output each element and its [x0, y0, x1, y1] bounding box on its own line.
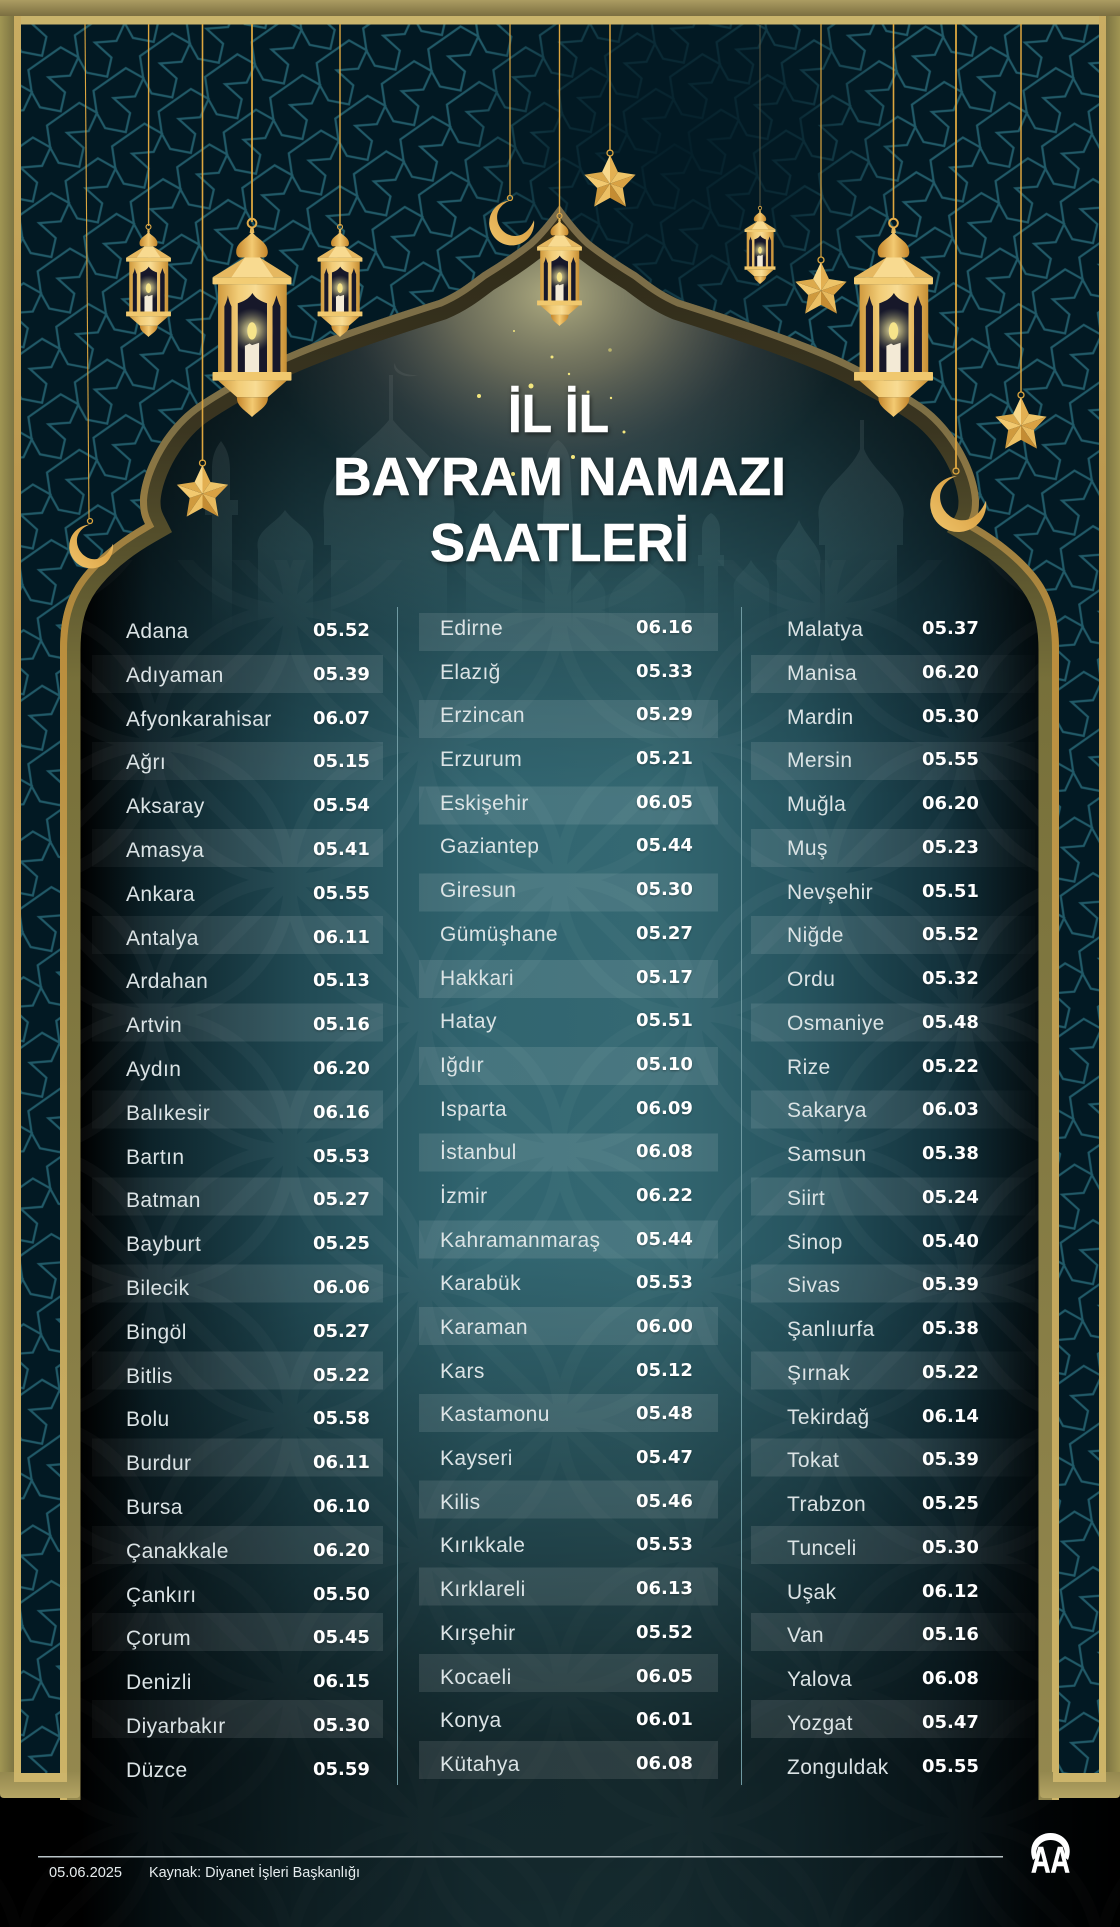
row Rize	[787, 1046, 1117, 1089]
row Yalova	[787, 1658, 1117, 1702]
star 3	[795, 257, 847, 314]
row Bartın: Bartın	[126, 1146, 184, 1169]
row Kırklareli: 06.13	[636, 1578, 693, 1599]
row Burdur	[126, 1452, 370, 1475]
row Kırşehir: 05.52	[636, 1622, 693, 1643]
row Kastamonu: Kastamonu	[440, 1403, 550, 1426]
row Batman	[126, 1189, 370, 1212]
row Karabük: 05.53	[636, 1272, 693, 1293]
row Erzurum	[440, 748, 693, 771]
row Elazığ	[440, 661, 693, 684]
row Muğla: Muğla	[787, 793, 846, 816]
lantern 6 large	[854, 219, 933, 417]
row Tokat: Tokat	[787, 1449, 839, 1472]
row Uşak: 06.12	[922, 1580, 979, 1602]
row Tekirdağ: Tekirdağ	[787, 1406, 870, 1428]
row Kırıkkale: 05.53	[636, 1534, 693, 1555]
row Artvin	[126, 1014, 370, 1037]
row Afyonkarahisar: 06.07	[313, 708, 370, 729]
column 1: Adana to Düzce	[126, 620, 370, 1782]
row Adana	[126, 620, 370, 643]
row Rize: 05.22	[922, 1056, 979, 1076]
row Siirt	[787, 1177, 1117, 1220]
row Adana: 05.52	[313, 620, 370, 641]
row Niğde	[787, 914, 1117, 958]
row Ardahan: Ardahan	[126, 970, 208, 993]
row Çankırı	[126, 1584, 370, 1607]
row Kırşehir: Kırşehir	[440, 1622, 516, 1645]
row Hakkari: 05.17	[636, 966, 693, 988]
row Şanlıurfa: Şanlıurfa	[787, 1318, 875, 1341]
row Hakkari: Hakkari	[440, 966, 514, 990]
row Van: Van	[787, 1624, 824, 1647]
crescent left	[69, 518, 113, 568]
row Gümüşhane: 05.27	[636, 923, 693, 944]
row Sivas: 05.39	[922, 1274, 979, 1295]
row Muğla: 06.20	[922, 793, 979, 814]
row İstanbul: İstanbul	[440, 1141, 517, 1164]
sparkles	[477, 330, 626, 476]
row Nevşehir: 05.51	[922, 880, 979, 902]
row Ordu: 05.32	[922, 968, 979, 989]
title: İL İL	[508, 384, 609, 444]
row Çanakkale: 06.20	[313, 1540, 370, 1561]
row Gaziantep	[440, 835, 693, 858]
row Aydın: 06.20	[313, 1058, 370, 1079]
row Ankara	[126, 883, 370, 906]
row Düzce: 05.59	[313, 1759, 370, 1780]
lantern 4 centre	[537, 213, 582, 326]
row Bilecik: 06.06	[313, 1277, 370, 1298]
lantern 3	[318, 224, 362, 337]
row Ankara: 05.55	[313, 883, 370, 904]
row Kars: 05.12	[636, 1360, 693, 1381]
row Ağrı: 05.15	[313, 751, 370, 772]
row Rize: Rize	[787, 1056, 831, 1078]
column 3: Malatya to Zonguldak	[787, 608, 1117, 1789]
row Artvin: 05.16	[313, 1014, 370, 1035]
row Kilis	[440, 1481, 770, 1524]
logo: AA: AA	[1031, 1840, 1070, 1880]
row Siirt: Siirt	[787, 1187, 825, 1210]
row Karaman	[440, 1306, 770, 1350]
row Samsun: Samsun	[787, 1143, 866, 1166]
row Bitlis	[126, 1365, 370, 1388]
row Malatya: 05.37	[922, 618, 979, 639]
row Mersin: 05.55	[922, 749, 979, 770]
row Eskişehir: 06.05	[636, 792, 693, 813]
divider 1	[397, 607, 398, 1785]
row Bingöl	[126, 1321, 370, 1344]
row Bilecik: Bilecik	[126, 1277, 189, 1300]
row Tunceli: Tunceli	[787, 1537, 857, 1560]
row Zonguldak: Zonguldak	[787, 1756, 889, 1778]
row Yozgat	[787, 1702, 1117, 1746]
row Kütahya: 06.08	[636, 1753, 693, 1774]
row Amasya	[126, 839, 370, 862]
row Gaziantep: Gaziantep	[440, 835, 539, 858]
row Trabzon: Trabzon	[787, 1493, 866, 1516]
row Şırnak: 05.22	[922, 1362, 979, 1383]
row Şanlıurfa: 05.38	[922, 1318, 979, 1339]
row İzmir: İzmir	[440, 1185, 488, 1208]
row Burdur: 06.11	[313, 1452, 370, 1473]
row Bitlis: 05.22	[313, 1365, 370, 1386]
lantern 1	[126, 224, 171, 337]
row Yalova: Yalova	[787, 1668, 852, 1691]
row Sakarya: Sakarya	[787, 1099, 867, 1122]
row Trabzon	[787, 1483, 1117, 1527]
lantern 5 small	[745, 206, 775, 284]
row Denizli: Denizli	[126, 1671, 192, 1694]
row Trabzon: 05.25	[922, 1493, 979, 1514]
row Karabük: Karabük	[440, 1272, 521, 1295]
row Kırklareli	[440, 1568, 770, 1612]
row Kilis: 05.46	[636, 1491, 693, 1512]
row İzmir	[440, 1175, 770, 1219]
row Konya: 06.01	[636, 1709, 693, 1730]
row Eskişehir: Eskişehir	[440, 792, 529, 815]
row Osmaniye	[787, 1002, 1117, 1046]
row Çankırı: Çankırı	[126, 1584, 196, 1607]
row Uşak	[787, 1570, 1117, 1614]
row Erzincan: 05.29	[636, 704, 693, 725]
arch border	[60, 205, 1059, 1800]
row Antalya: Antalya	[126, 927, 199, 950]
row Bingöl: Bingöl	[126, 1321, 187, 1344]
row Bursa: Bursa	[126, 1496, 183, 1519]
row Malatya: Malatya	[787, 618, 863, 641]
row Muş: Muş	[787, 837, 828, 860]
title: SAATLERİ	[430, 513, 689, 573]
star 4	[995, 392, 1047, 449]
row Bilecik	[126, 1277, 370, 1300]
row Bayburt: Bayburt	[126, 1233, 201, 1256]
row Van	[787, 1614, 1117, 1658]
row Yalova: 06.08	[922, 1668, 979, 1689]
row Isparta	[440, 1088, 770, 1131]
row Şırnak	[787, 1352, 1117, 1396]
row Bartın: 05.53	[313, 1146, 370, 1167]
row Kocaeli: Kocaeli	[440, 1666, 512, 1688]
row Antalya: 06.11	[313, 927, 370, 948]
row Edirne	[440, 617, 693, 640]
row Kayseri: Kayseri	[440, 1447, 513, 1470]
row Diyarbakır: 05.30	[313, 1715, 370, 1736]
row Erzincan: Erzincan	[440, 704, 525, 727]
row Manisa	[787, 652, 1117, 696]
divider 2	[741, 607, 742, 1785]
row Ardahan: 05.13	[313, 970, 370, 991]
row Ankara: Ankara	[126, 883, 195, 906]
row Elazığ: 05.33	[636, 661, 693, 682]
row Diyarbakır: Diyarbakır	[126, 1715, 226, 1738]
row Sinop	[787, 1220, 1117, 1264]
row Kırklareli: Kırklareli	[440, 1578, 526, 1601]
arch interior	[61, 206, 1057, 1927]
row Osmaniye: 05.48	[922, 1012, 979, 1033]
row Bayburt	[126, 1233, 370, 1256]
row Adıyaman: Adıyaman	[126, 664, 224, 687]
row Iğdır: Iğdır	[440, 1054, 484, 1077]
lantern 2 large	[213, 219, 291, 417]
row Kars: Kars	[440, 1360, 485, 1383]
row Yozgat: Yozgat	[787, 1712, 853, 1735]
row Ağrı: Ağrı	[126, 751, 166, 774]
row Tunceli	[787, 1527, 1117, 1570]
row Hatay: Hatay	[440, 1010, 497, 1033]
row Tekirdağ	[787, 1396, 1117, 1439]
row Konya: Konya	[440, 1709, 502, 1732]
row Iğdır: 05.10	[636, 1054, 693, 1075]
row Gümüşhane: Gümüşhane	[440, 923, 558, 946]
stripes: column 3	[751, 655, 998, 1738]
row Bursa: 06.10	[313, 1496, 370, 1517]
row Giresun: Giresun	[440, 879, 516, 902]
row Sivas: Sivas	[787, 1274, 840, 1297]
row Burdur: Burdur	[126, 1452, 191, 1475]
row Mersin	[787, 739, 1117, 783]
row Aksaray: 05.54	[313, 795, 370, 816]
row Hatay: 05.51	[636, 1010, 693, 1031]
row Çanakkale	[126, 1540, 370, 1563]
row Balıkesir: Balıkesir	[126, 1102, 210, 1125]
row Aksaray	[126, 795, 370, 818]
row Mersin: Mersin	[787, 749, 852, 772]
row Kütahya: Kütahya	[440, 1753, 520, 1776]
row Van: 05.16	[922, 1624, 979, 1645]
row Niğde: 05.52	[922, 924, 979, 945]
row Kahramanmaraş: Kahramanmaraş	[440, 1229, 600, 1252]
row Eskişehir	[440, 792, 693, 815]
row Adıyaman	[126, 664, 370, 687]
row Artvin: Artvin	[126, 1014, 182, 1037]
row Çorum	[126, 1627, 370, 1650]
column 2: Edirne to Kütahya	[440, 617, 693, 1776]
row Batman: 05.27	[313, 1189, 370, 1210]
star 1	[177, 460, 228, 517]
row Denizli: 06.15	[313, 1671, 370, 1692]
row Amasya: 05.41	[313, 839, 370, 860]
row Kahramanmaraş: 05.44	[636, 1229, 693, 1250]
row Düzce: Düzce	[126, 1759, 188, 1782]
row Bolu: Bolu	[126, 1408, 170, 1431]
row Bolu	[126, 1408, 370, 1431]
row Balıkesir: 06.16	[313, 1102, 370, 1123]
title	[333, 384, 786, 573]
mosque silhouette	[205, 364, 904, 584]
row Mardin: Mardin	[787, 706, 854, 728]
row Malatya	[787, 608, 1117, 652]
row Kocaeli: 06.05	[636, 1666, 693, 1686]
row Isparta: 06.09	[636, 1098, 693, 1119]
row Tokat: 05.39	[922, 1449, 979, 1470]
footer rule	[38, 1856, 1003, 1858]
row İzmir: 06.22	[636, 1185, 693, 1206]
row Afyonkarahisar: Afyonkarahisar	[126, 708, 272, 731]
crescent top	[489, 196, 534, 245]
row Afyonkarahisar	[126, 708, 370, 731]
row Hatay	[440, 1010, 693, 1033]
row Aydın: Aydın	[126, 1058, 181, 1081]
row Çorum: Çorum	[126, 1627, 191, 1650]
row Kastamonu: 05.48	[636, 1403, 693, 1424]
row Manisa: Manisa	[787, 662, 857, 685]
row Batman: Batman	[126, 1189, 201, 1212]
row Çanakkale: Çanakkale	[126, 1540, 229, 1563]
row Ağrı	[126, 751, 370, 774]
row Bayburt: 05.25	[313, 1233, 370, 1254]
row Balıkesir	[126, 1102, 370, 1125]
row Tunceli: 05.30	[922, 1537, 979, 1558]
row Tekirdağ: 06.14	[922, 1406, 979, 1426]
row Nevşehir: Nevşehir	[787, 880, 873, 904]
row Çankırı: 05.50	[313, 1584, 370, 1605]
footer date: 05.06.2025	[49, 1865, 122, 1881]
row Kırşehir	[440, 1612, 770, 1656]
row Bolu: 05.58	[313, 1408, 370, 1429]
row Siirt: 05.24	[922, 1187, 979, 1208]
row Sakarya	[787, 1089, 1117, 1133]
row Kırıkkale: Kırıkkale	[440, 1534, 525, 1557]
row Denizli	[126, 1671, 370, 1694]
row Kayseri: 05.47	[636, 1447, 693, 1468]
row Erzurum: Erzurum	[440, 748, 522, 771]
title: BAYRAM NAMAZI	[333, 447, 786, 507]
row Mardin: 05.30	[922, 706, 979, 726]
row Erzincan	[440, 704, 693, 727]
row İstanbul	[440, 1131, 770, 1175]
row Adıyaman: 05.39	[313, 664, 370, 685]
row Bitlis: Bitlis	[126, 1365, 173, 1388]
row Tokat	[787, 1439, 1117, 1483]
row Aksaray: Aksaray	[126, 795, 205, 818]
row Sakarya: 06.03	[922, 1099, 979, 1120]
row Muş: 05.23	[922, 837, 979, 858]
row Bingöl: 05.27	[313, 1321, 370, 1342]
row Kastamonu	[440, 1393, 770, 1437]
row Iğdır	[440, 1054, 693, 1077]
row Karaman: 06.00	[636, 1316, 693, 1337]
row Ordu: Ordu	[787, 968, 835, 991]
row Düzce	[126, 1759, 370, 1782]
row Aydın	[126, 1058, 370, 1081]
row Kırıkkale	[440, 1524, 770, 1568]
row Adana: Adana	[126, 620, 189, 643]
row Zonguldak	[787, 1746, 1117, 1789]
row Giresun	[440, 879, 693, 902]
row Bartın	[126, 1146, 370, 1169]
row Zonguldak: 05.55	[922, 1756, 979, 1776]
row Osmaniye: Osmaniye	[787, 1012, 885, 1035]
crescent right	[930, 468, 986, 532]
stripes: column 1	[92, 655, 383, 1738]
row Gümüşhane	[440, 923, 693, 946]
row Kahramanmaraş	[440, 1219, 770, 1262]
row Elazığ: Elazığ	[440, 661, 501, 684]
row Kayseri	[440, 1437, 770, 1481]
row Bursa	[126, 1496, 370, 1519]
row Sivas	[787, 1264, 1117, 1308]
row İstanbul: 06.08	[636, 1141, 693, 1162]
star 2	[584, 150, 636, 207]
logo: AA	[1031, 1833, 1070, 1880]
row Yozgat: 05.47	[922, 1712, 979, 1733]
row Kilis: Kilis	[440, 1491, 481, 1514]
row Amasya: Amasya	[126, 839, 204, 862]
row Erzurum: 05.21	[636, 748, 693, 769]
row Antalya	[126, 927, 370, 950]
row Niğde: Niğde	[787, 924, 844, 947]
row Şanlıurfa	[787, 1308, 1117, 1352]
row Edirne: Edirne	[440, 617, 503, 640]
row Samsun	[787, 1133, 1117, 1177]
row Edirne: 06.16	[636, 617, 693, 638]
hanging strings	[85, 24, 1021, 518]
row Kars	[440, 1350, 770, 1393]
row Gaziantep: 05.44	[636, 835, 693, 856]
row Ardahan	[126, 970, 370, 993]
row Karabük	[440, 1262, 770, 1306]
row Samsun: 05.38	[922, 1143, 979, 1164]
row Şırnak: Şırnak	[787, 1362, 850, 1385]
row Çorum: 05.45	[313, 1627, 370, 1648]
row Isparta: Isparta	[440, 1098, 507, 1121]
row Nevşehir	[787, 870, 1117, 914]
row Muş	[787, 827, 1117, 870]
row Manisa: 06.20	[922, 662, 979, 683]
stripes: column 2	[419, 613, 718, 1779]
row Kütahya	[440, 1743, 770, 1787]
row Diyarbakır	[126, 1715, 370, 1738]
row Kocaeli	[440, 1656, 770, 1699]
row Giresun: 05.30	[636, 879, 693, 900]
row Uşak: Uşak	[787, 1580, 836, 1604]
row Konya	[440, 1699, 770, 1743]
row Sinop: Sinop	[787, 1230, 843, 1254]
row Karaman: Karaman	[440, 1316, 528, 1339]
row Sinop: 05.40	[922, 1230, 979, 1252]
row Muğla	[787, 783, 1117, 827]
footer source: Kaynak: Diyanet İşleri Başkanlığı	[149, 1865, 360, 1881]
row Mardin	[787, 696, 1117, 739]
row Hakkari	[440, 966, 693, 990]
row Ordu	[787, 958, 1117, 1002]
